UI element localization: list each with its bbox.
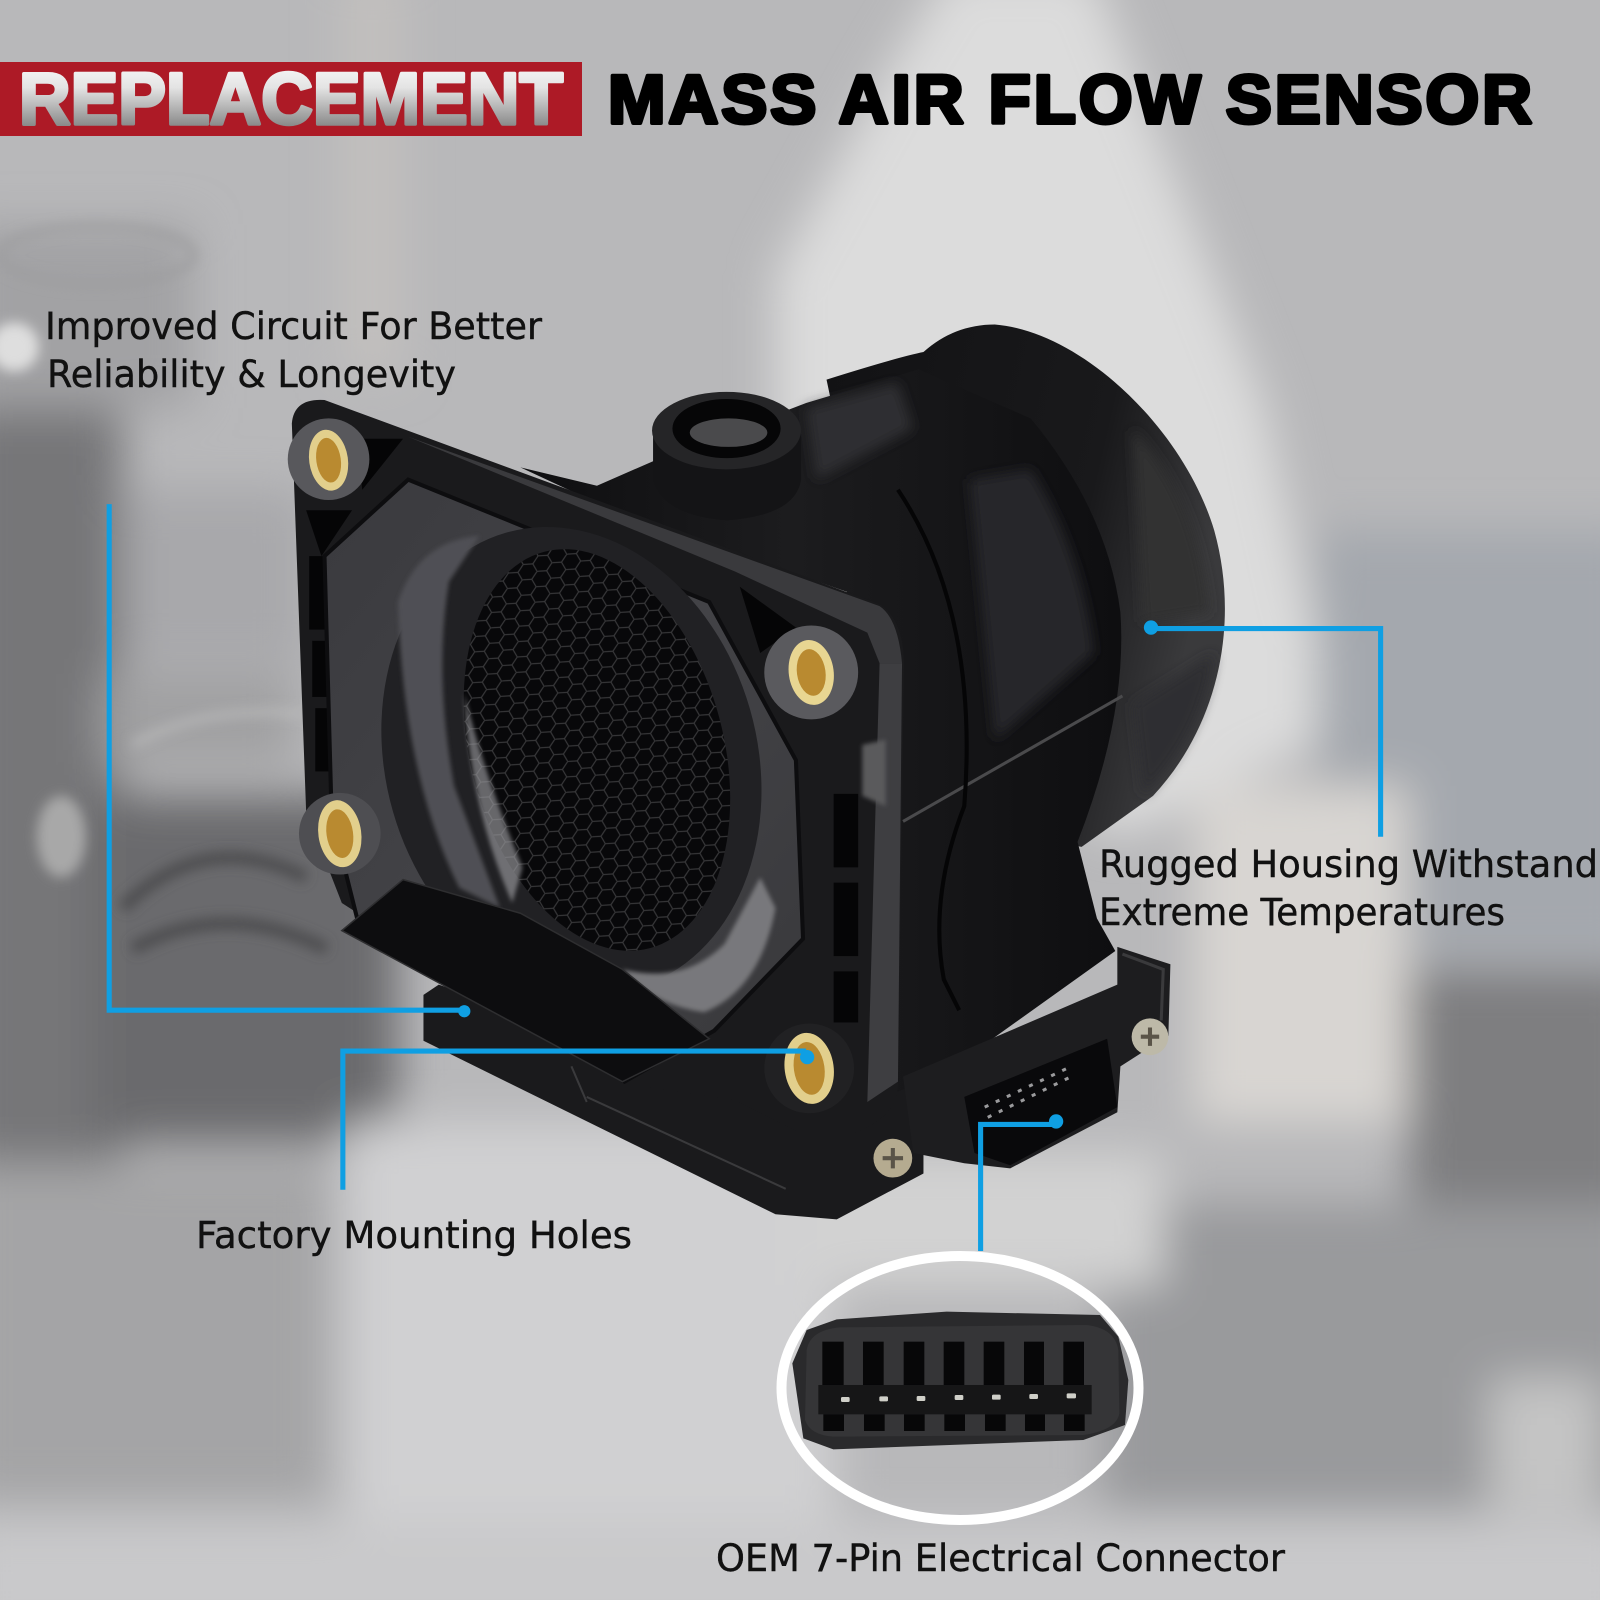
white oval <box>782 1256 1138 1520</box>
heading text: MASS AIR FLOW SENSOR <box>608 61 1532 138</box>
electrical connector <box>903 947 1170 1168</box>
screws <box>873 1018 1168 1178</box>
brass inserts <box>305 427 838 1107</box>
raised octagonal ring <box>324 480 803 1082</box>
intake reflections <box>464 694 522 903</box>
sensor rear cylinder <box>827 324 1225 847</box>
arrow: circuit callout <box>109 504 470 1017</box>
mounting lobes <box>288 418 858 1113</box>
label: circuit <box>45 304 543 396</box>
label: housing: Rugged Housing Withstand <box>1099 842 1598 886</box>
label: housing <box>1099 842 1598 934</box>
connector close-up <box>792 1312 1128 1449</box>
arrow: connector callout <box>981 1114 1063 1251</box>
sensor base <box>423 985 923 1219</box>
sensor mid body <box>520 369 1121 1117</box>
bell mouth intake <box>328 481 815 1039</box>
arrow: mounting holes callout <box>343 1050 814 1190</box>
label: circuit: Reliability & Longevity <box>47 352 456 396</box>
honeycomb mesh screen <box>422 519 772 981</box>
red banner with REPLACEMENT: REPLACEMENT <box>19 59 563 140</box>
label: connector: OEM 7-Pin Electrical Connector <box>716 1536 1286 1580</box>
front mounting flange <box>292 400 904 1133</box>
title <box>0 59 1532 140</box>
label: circuit: Improved Circuit For Better <box>45 304 543 348</box>
label: mounting holes: Factory Mounting Holes <box>196 1213 632 1257</box>
bottom flap <box>342 880 709 1082</box>
top port <box>652 392 801 520</box>
callout lines <box>109 504 1381 1251</box>
label: housing: Extreme Temperatures <box>1099 890 1505 934</box>
arrow: housing callout <box>1144 620 1381 837</box>
mass air flow sensor product <box>288 324 1225 1219</box>
connector detail inset <box>782 1256 1138 1520</box>
